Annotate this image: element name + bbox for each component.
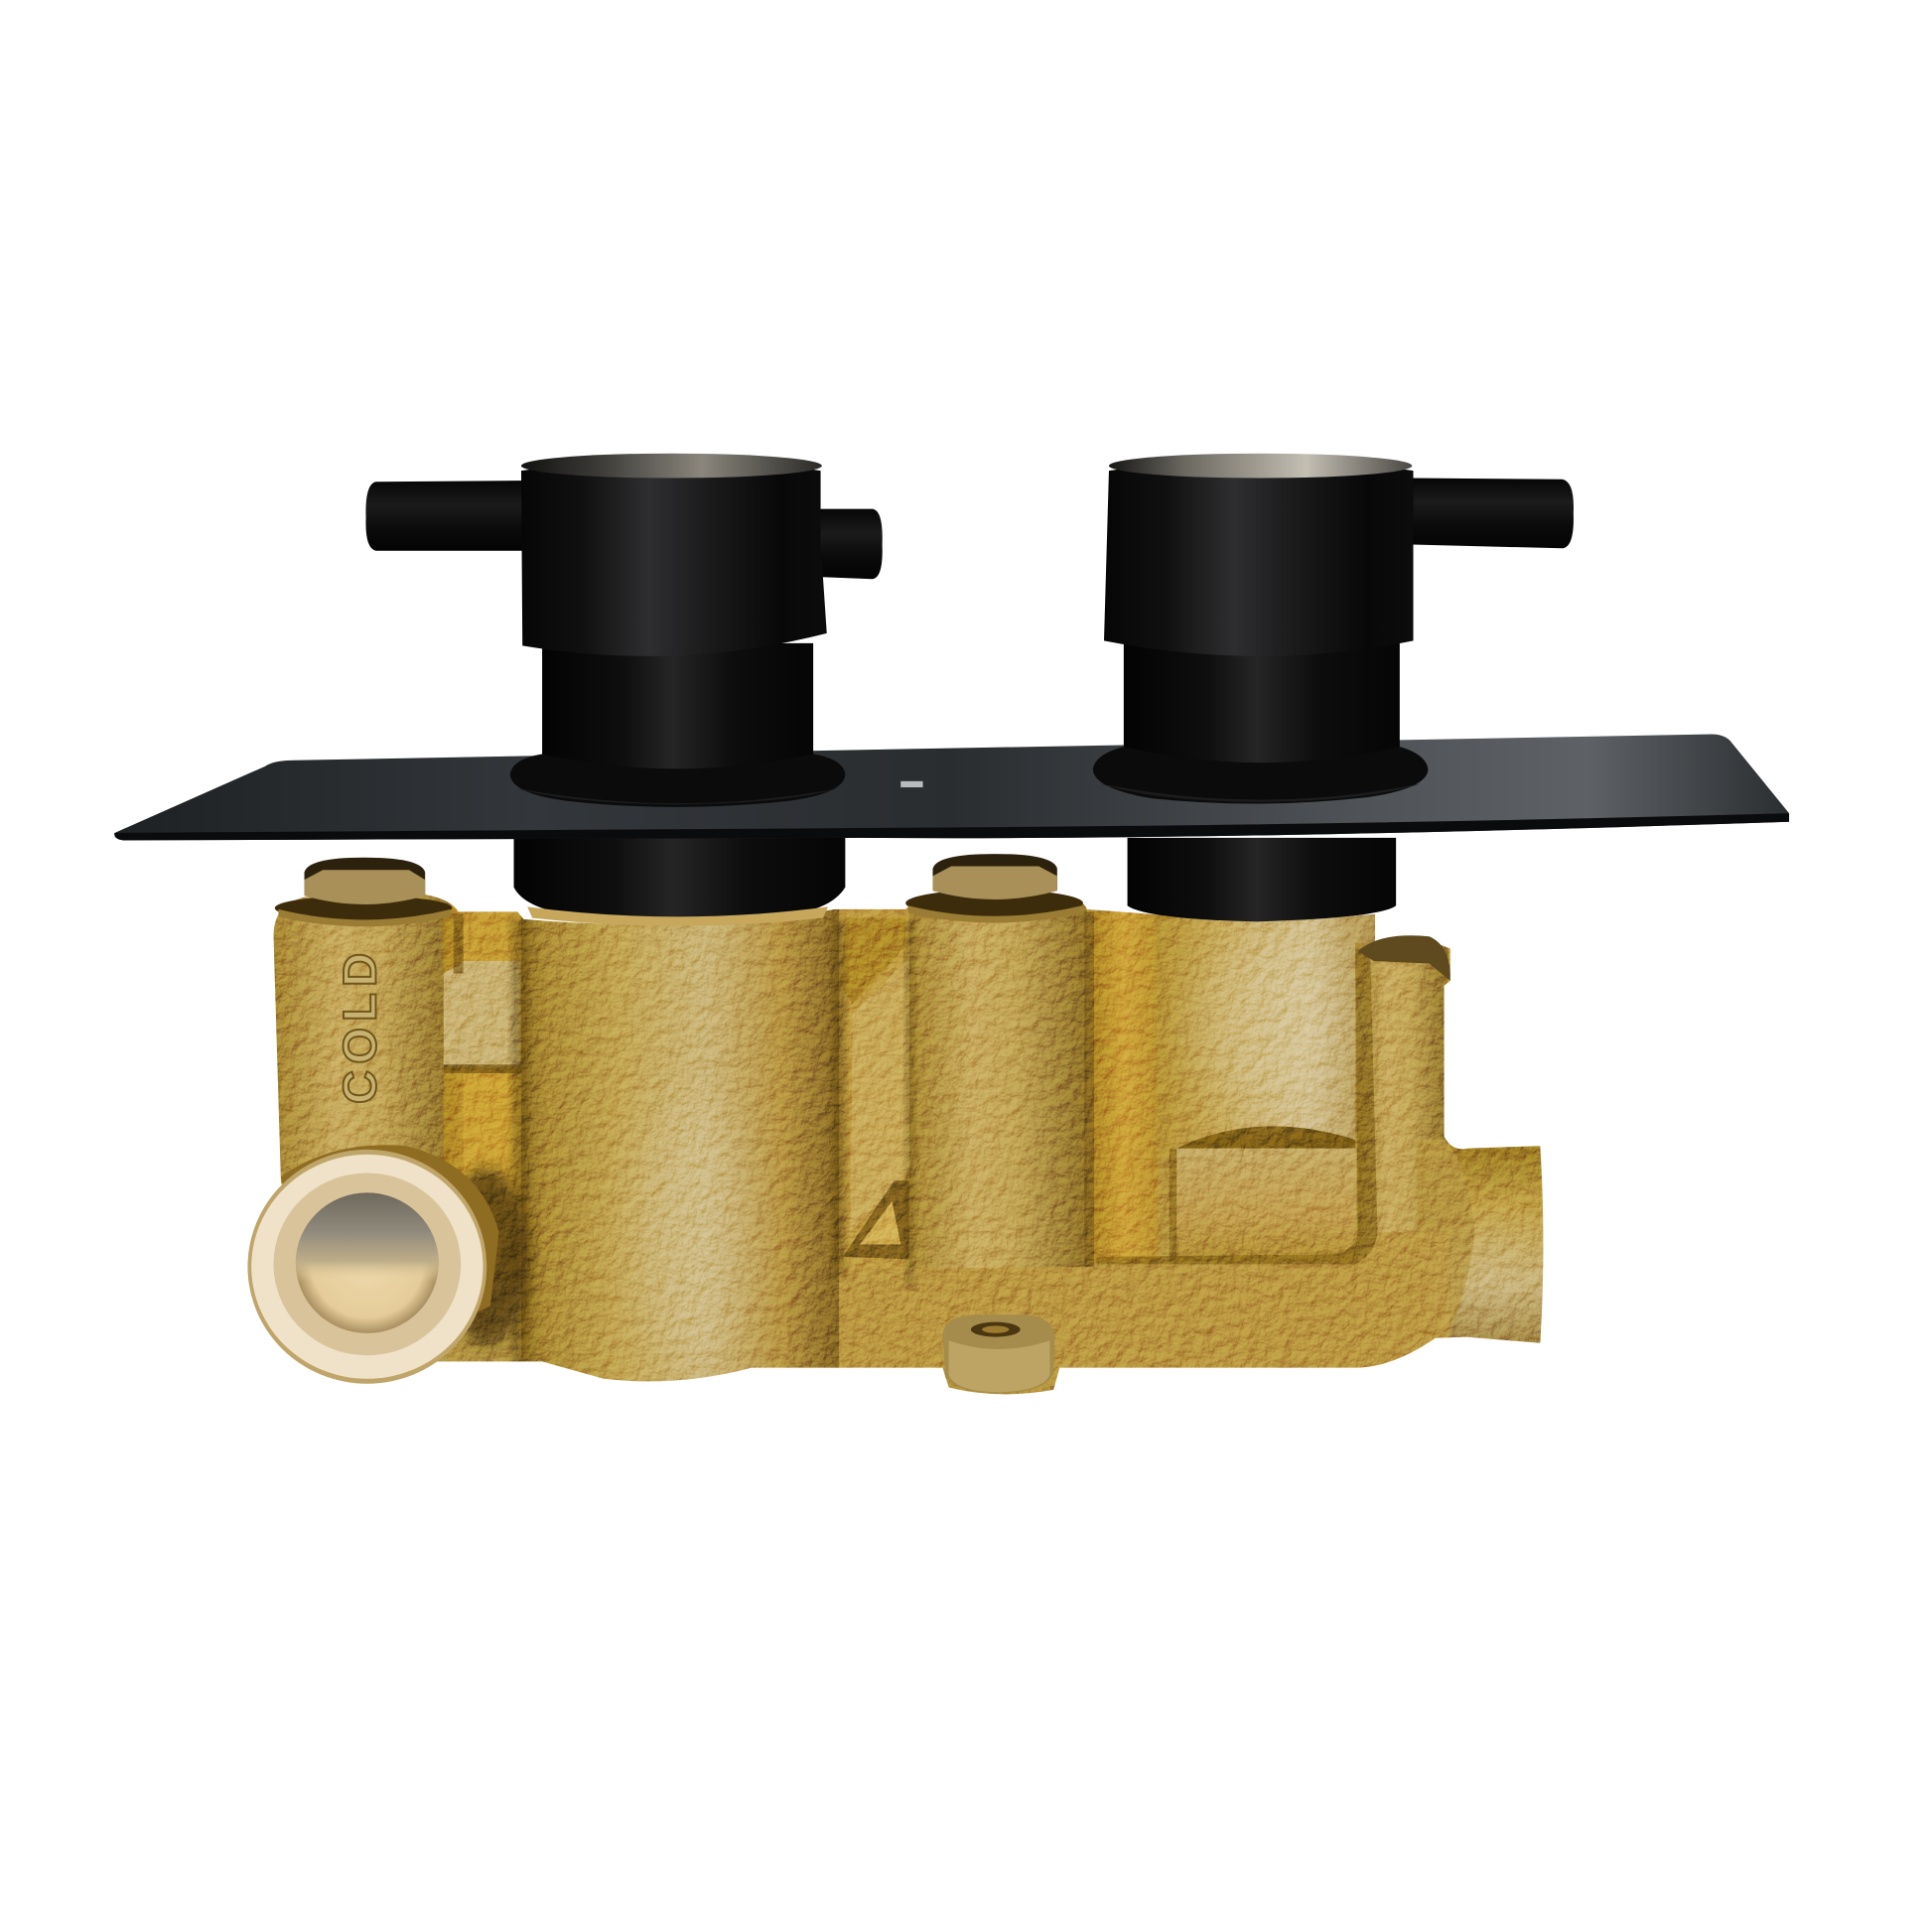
lower body section of left handle: [514, 838, 845, 926]
brass sleeve ring: [527, 906, 828, 926]
lower connector left: [443, 1323, 521, 1362]
plate logo mark: [900, 781, 923, 787]
product illustration: concealed shower valve: [114, 453, 1789, 1394]
neck: [1124, 643, 1400, 762]
lower body section of right handle: [1128, 838, 1396, 921]
right flange tab: [1358, 935, 1450, 981]
handle body: [1104, 460, 1414, 656]
hex bolt middle: [905, 854, 1083, 923]
vertical rib: [1090, 911, 1159, 1263]
handle body: [521, 460, 827, 656]
casting shadows: [445, 918, 914, 1374]
right vertical pipe: [1355, 943, 1448, 1237]
handle top cap: [521, 454, 822, 479]
right cylinder: [1155, 911, 1376, 1159]
neck: [542, 643, 813, 768]
outlet stub: [1442, 1146, 1545, 1343]
web between central cylinder and middle column: [840, 907, 909, 1275]
mounting boss with threaded hole: [942, 1314, 1054, 1394]
left column casting: [274, 895, 453, 1183]
pale oxidised patches: [634, 936, 1534, 1368]
central cylinder: [521, 905, 839, 1392]
brass valve body: [246, 881, 1578, 1411]
square boss: [1170, 1126, 1356, 1262]
long lever: [365, 481, 530, 551]
left handle: [365, 454, 883, 807]
cover plate: [114, 735, 1789, 840]
horizontal pipe run: [909, 1232, 1449, 1338]
middle column: [909, 903, 1086, 1269]
lever: [1412, 479, 1574, 548]
texture overlay: [274, 896, 1543, 1394]
right handle: [1093, 454, 1574, 804]
handle top cap: [1109, 454, 1412, 479]
inlet socket with plastic cap: [247, 1145, 499, 1384]
cast lettering COLD: COLD: [334, 947, 386, 1104]
left ribs recess: [443, 905, 521, 1195]
flange: [1093, 747, 1428, 804]
flange: [510, 755, 845, 807]
short lever: [813, 509, 883, 579]
hex bolt left: [275, 858, 452, 926]
